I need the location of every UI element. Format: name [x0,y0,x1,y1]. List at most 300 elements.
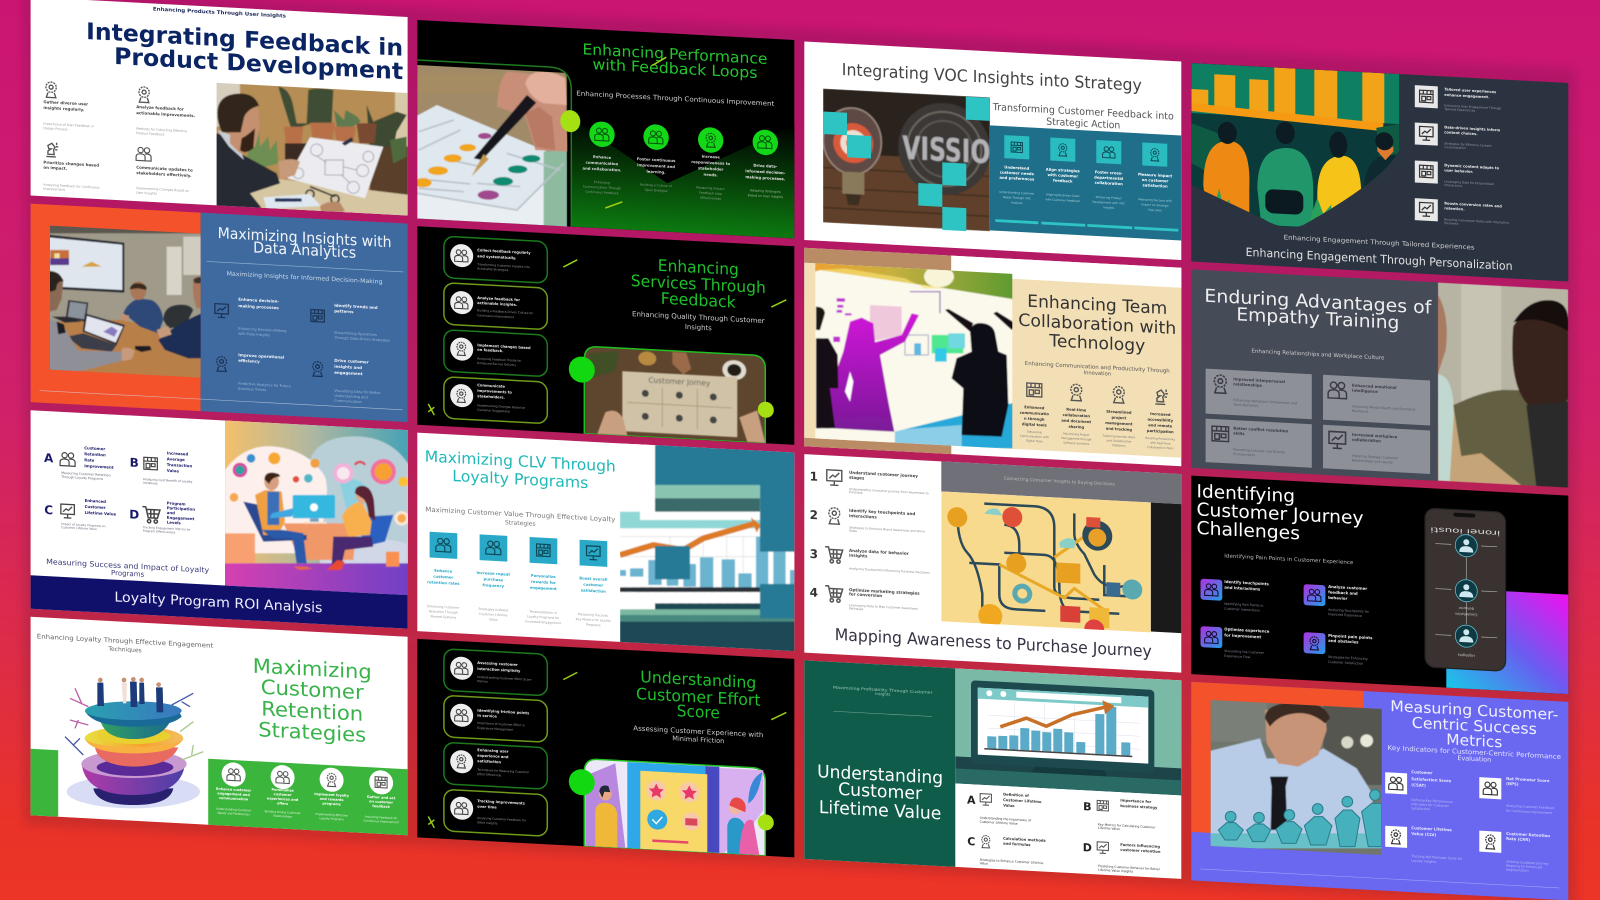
item: tailored: enhance engagement. [1444,93,1489,99]
item B: Analyzing Cost Benefit of Loyalty [143,477,193,484]
pill 3: Enhancing user [477,748,509,754]
title: Challenges [1197,518,1300,544]
title: Integrating VOC Insights into Strategy [842,60,1142,95]
item D [1083,841,1161,875]
column 4: Analyzing Feedback for [365,815,398,820]
subtitle: Innovation [1084,370,1111,378]
column 1: customer [433,574,453,580]
item A: Definition of [1003,793,1029,798]
column 1: n through [1024,417,1045,422]
pill 1: Actionable Strategies [477,266,509,272]
item A: Customer Lifetime [1003,798,1042,804]
title: Enhancing [658,256,739,279]
item 1 [1385,768,1453,812]
lime dashes [605,54,666,211]
pill 4: Analyzing Customer Feedback for [477,816,527,822]
step 3: stakeholder [698,165,724,172]
column 2 [476,534,510,623]
subtitle [425,506,615,532]
column 4: Increased [1150,412,1171,417]
column 2: Building Strong Customer [265,809,301,815]
pill 2: actionable insights. [477,301,517,307]
item: analyze: actionable improvements. [136,110,196,118]
column 1: Understanding Customer [999,190,1035,196]
pill 1: Assessing customer [477,661,518,667]
decorative lime oval [560,110,580,133]
subtitle [1388,744,1561,768]
item B: business strategy [1120,804,1158,810]
step 3: Analyzing Touchpoints Influencing Purchase Decisions [849,566,930,575]
step 3: needs. [704,172,718,177]
title: Customer [838,780,923,804]
column 3: engagement [530,585,557,591]
column 4: Measuring Success with [1138,197,1172,203]
item B: B [130,455,139,470]
item 3: Tracking Net Promoter Score for [1410,854,1463,861]
column 2: collaboration [1063,413,1090,418]
column 4: satisfaction [581,587,606,594]
column 2: offers [277,801,288,806]
step 1: Enhancing [594,180,610,185]
item: conversion: retention. [1444,206,1465,212]
card 1: Enhancing Workplace Collaboration and [1233,398,1297,405]
pill 4: Implementing Changes Based on [477,403,525,410]
subtitle: Strategies [505,519,536,528]
item D: Tracking Engagement Metrics for [142,525,191,532]
panel subtitle: Maximizing Profitability Through Customer [833,685,933,695]
column 4: on customer [1142,177,1169,183]
phone mockup: ironei iousti [1430,525,1500,537]
column 2: Customer Lifetime [479,612,508,617]
column 3: Personalize [531,573,556,579]
step 2: Sales [849,529,857,533]
column 4: and remote [1148,423,1173,429]
column 1: Understanding Customer [216,807,252,813]
item A: Improvement [84,463,114,470]
column 3: collaboration [1095,180,1123,186]
item: gather [43,82,94,133]
dark side block [1151,502,1181,633]
illustration: layered funnel with people [65,677,203,808]
slide: Enduring Advantages of Empathy Training [1191,269,1568,488]
column 3: Insights [1103,205,1115,210]
item: tailored [1415,85,1501,114]
item 2 [1304,583,1370,618]
slide: Enhancing Team Collaboration with Technology [804,244,1181,468]
title: Enhancing Team [1027,292,1167,319]
navy band with title: Loyalty Program ROI Analysis [114,589,322,616]
item 3: Customer Lifetime [1411,825,1452,832]
item D: and [167,510,175,515]
column 3: programs [322,801,341,806]
pill 3 [444,330,547,377]
item: communicate: Communicate updates to [136,165,193,173]
item: data driven: content choices. [1444,130,1478,136]
subtitle [633,724,763,747]
gray band [941,461,1181,504]
column 4: Measure impact [1138,171,1172,178]
column 2: Increase repeat [476,570,510,577]
step 4: Optimize marketing strategies [849,587,920,596]
phone mockup: Highlights [1458,653,1475,658]
pill 4: Communicate [477,383,506,389]
pill 2 [444,283,547,330]
subtitle: Enhancing Processes Through Continuous Improvement [576,89,775,108]
item B: Initiatives [143,481,158,486]
column 3: Loyalty Programs [319,816,344,821]
column 2: and document [1061,419,1091,424]
subtitle: Enhancing Quality Through Customer [632,310,765,325]
step 2: 2 [810,508,818,522]
item: communicate: User Insights [136,191,157,196]
slide: Enhancing Performance with Feedback Loops [414,20,794,253]
step 2: Building a Culture of [640,183,673,188]
pill 1 [444,649,547,696]
item C: C [967,835,975,848]
column 2: Real-time [1066,407,1087,413]
card 4 [1323,425,1430,474]
item 2: feedback and [1328,589,1358,596]
column 2 [265,764,301,819]
column 3 [525,537,562,625]
title: Metrics [1446,730,1502,751]
card 3 [1206,419,1312,468]
title [817,762,943,824]
column 2: experiences and [267,796,299,802]
item: decisions: making processes [238,303,279,310]
column 3: Fostering Remote Work [1103,434,1136,439]
subtitle: Enhancing Loyalty Through Effective Engagement [37,632,214,650]
slide: Loyalty Program ROI Analysis [31,393,420,629]
column 2: Value [489,617,498,622]
green gradient panel [571,113,794,238]
column 2: customer [274,792,292,797]
photo: blurred businessman with figures [1210,700,1382,855]
item: conversion [1415,198,1509,228]
step 4: Adapting Strategies [750,188,781,194]
item C: Customer [85,504,106,510]
card 3: Better conflict resolution [1233,426,1289,433]
item A [967,791,1042,827]
column 4: Continuous Improvement [363,818,400,824]
item: communicate: stakeholders effectively. [136,170,192,178]
column 3: and Collaborative [1107,438,1132,444]
column 3: Streamlined [1106,410,1132,415]
column 4: Impact on Strategic [1141,202,1169,208]
pill 3: Effort Effectively [477,772,502,777]
column 2: frequency [483,582,505,588]
title: Collaboration with [1018,311,1176,339]
column 1: digital tools [1022,422,1048,428]
column 2: Align strategies [1046,167,1081,173]
item C: and formulas [1003,842,1031,847]
item: decisions: Enhance decision- [238,297,279,304]
item: gather: Design Process [43,126,68,131]
column 4: with Real-Time [1150,441,1171,446]
column 2: sharing [1068,425,1084,430]
item C: Strategies to Enhance Customer Lifetime [980,858,1043,865]
item: trends: Identify trends and [334,303,378,310]
step 1: Purchase [849,490,863,495]
item: engagement: insights and [334,364,362,370]
teal panel [990,125,1181,240]
item 4: Pinpoint pain points [1328,633,1373,640]
column 1: communication [219,796,249,802]
item A: A [44,451,54,465]
item: dynamic: user behavior. [1444,168,1473,174]
item: prioritize: on impact. [43,165,68,171]
step 2: learning. [647,169,666,175]
title [1018,291,1176,358]
item: dynamic: Interactions [1444,183,1463,188]
column 4: on customer [369,799,393,805]
item: efficiency [217,351,291,393]
step 4 [745,129,786,199]
photo: customer journey board: Customer Jorney [648,376,711,388]
column 4 [1145,388,1175,450]
column 4: Boost overall [579,575,607,582]
lime decor [428,252,786,434]
item 4 [1304,632,1373,666]
step 4: making processes. [745,174,786,181]
item: conversion: Boosting Conversion Rates with Interactive [1444,217,1509,225]
pill 3: Enhanced Service Delivery [477,361,516,367]
subtitle: Enhancing Engagement Through Tailored Experiences [1284,233,1475,252]
column 2: Management through [1061,436,1092,442]
subtitle: Key Indicators for Customer-Centric Performance [1388,744,1561,761]
title: Customer Journey [1197,499,1364,529]
column 3: Implement loyalty [314,792,350,798]
item 3: Visualizing the Customer [1224,649,1265,655]
title: Enduring Advantages of [1204,286,1432,319]
item: engagement: Communication [334,399,362,404]
item: engagement: Visualizing Data for Better [334,389,381,395]
column 3: and rewards [320,797,344,802]
card 1 [1206,369,1312,419]
item 1: Identify touchpoints [1224,579,1270,586]
item: engagement: Drive customer [334,358,369,365]
column 1: customer needs [1000,169,1035,176]
item: decisions: with Data Insights [238,332,270,337]
column 3 [1103,386,1136,448]
item 1: (CSAT) [1411,782,1426,788]
slide: Enhancing Services Through Feedback [417,226,794,445]
column 1: Digital Tools [1026,439,1043,443]
step 1: Understand customer journey [849,470,918,478]
item 4: Rate (CRR) [1506,836,1530,842]
column 3: Increased Engagement [525,619,562,625]
step 4: informed decision- [745,168,786,175]
item: engagement [313,357,381,405]
item C: Calculation methods [1003,837,1046,843]
column 2 [1045,137,1081,203]
step 1: stages [849,475,865,481]
pill 4: Effort Insights [477,820,498,825]
illustration: two people at a laptop [225,420,408,596]
title: Understanding [640,667,756,692]
photo: pen on checklist [417,65,568,226]
step 4: 4 [810,585,818,600]
column 1: Communication with [1020,434,1049,439]
column 1: Reward Systems [430,614,457,620]
item: analyze: Methods for Collecting Effective [136,127,187,133]
item C: Customer Lifetime Value [61,525,97,531]
column 3: Platforms [1112,443,1126,448]
teal mosaic squares [823,89,990,232]
step 3: responsiveness to [691,159,731,166]
item: efficiency: Improve operational [238,352,285,360]
image: laptop chart with teal overlays [620,443,794,652]
item: gather: insights regularly. [43,105,85,112]
title [253,654,372,747]
step 3: Increase [702,154,720,160]
subtitle [992,102,1174,134]
item: efficiency: Predictive Analytics for Future [238,382,291,388]
column 2: Strategies to Boost [478,607,509,612]
title [1204,286,1432,336]
item 3: Value (CLV) [1411,831,1436,837]
photo: silhouettes at whiteboard [815,263,1012,449]
title: Customer [261,675,365,704]
step 2: Identify key touchpoints and [849,508,915,516]
item: data driven: Customization [1444,145,1466,150]
item: tailored: Tailored Experiences [1443,107,1476,113]
subtitle: Assessing Customer Experience with [633,724,763,739]
column 4: feedback [372,804,391,809]
step 2 [810,506,925,537]
column 1: retention rates [427,579,460,586]
pill 2 [444,695,547,742]
title: Lifetime Value [819,798,941,824]
item 3: Loyalty Insights [1411,859,1437,864]
title: Loyalty Programs [452,467,588,492]
subtitle: Strategic Action [1046,117,1120,132]
column 3: Implementing Effective [315,812,348,818]
item: communicate [136,147,193,198]
card 3: Environments [1233,452,1256,457]
lime and green dots [569,769,774,831]
photo: customer journey board [584,346,766,444]
title [1196,481,1364,548]
subtitle: Minimal Friction [672,734,724,745]
step 3: Analyze data for behavior [849,548,909,556]
title: Mapping Awareness to Purchase Journey [835,625,1152,661]
item: dynamic [1415,160,1500,190]
pill 2: Continuous Improvement [477,313,515,319]
item D: Predicting Customer Behavior for Better [1098,864,1161,871]
subtitle [632,310,765,335]
step 2: Open Dialogue [645,188,668,193]
step 3 [691,126,731,201]
card 3: Promoting Inclusive and Diverse [1233,448,1285,454]
item 4: Customer Satisfaction [1328,660,1363,666]
pill 4: Customer Suggestions [477,408,510,414]
item 1: Defining Key Performance [1411,798,1453,804]
title [218,224,392,264]
dark green panel [804,660,955,867]
pill 1: interaction simplicity [477,667,521,673]
pill 1: Collect feedback regularly [477,248,531,255]
title: Data Analytics [253,238,356,262]
column 1 [216,762,252,817]
item: conversion: Elements [1444,221,1459,226]
step 1: Communication Through [583,184,621,191]
item 3 [1200,625,1270,660]
pill 4 [444,789,547,836]
item B: Lifetime Value [1098,826,1120,831]
column 4: Gather and act [367,795,396,800]
pill 2: Experience Management [477,726,514,732]
item: engagement: engagement [334,370,363,376]
column 3: Foster cross- [1095,169,1123,176]
subtitle: Measuring Success and Impact of Loyalty [46,557,210,575]
item: prioritize [43,142,100,194]
item: prioritize: Improvement [43,187,66,192]
item 3 [1385,824,1463,865]
pill 4: Tracking improvements [477,799,525,806]
item D: Factors influencing [1120,843,1160,849]
beige and brown blocks [804,248,1181,466]
illustration: rating on a phone [584,758,766,856]
item D: Levels [167,520,181,525]
column 3: and tracking [1106,427,1132,432]
item D [129,498,195,536]
column 2: Software Solutions [1063,441,1090,446]
item: engagement: Understanding and [334,394,368,399]
item C [967,835,1046,869]
item B: Importance for [1120,798,1151,804]
column 2: Relationships [273,814,292,819]
pill 1: Metrics [477,679,488,684]
item D: D [1083,841,1092,855]
subtitle: Identifying Pain Points in Customer Experience [1224,553,1353,566]
step 1: Understanding Consumer Journey from Awareness to [849,487,929,495]
step 3: Effectiveness [700,196,721,201]
step 4: Drive data- [753,163,778,169]
green panel [208,759,408,835]
title: Enhancing Performance [582,40,768,68]
item: communicate: Implementing Changes Based on [136,186,189,193]
pill 1: Transforming Customer Insights into [476,262,530,269]
pill 2: Analyze feedback for [477,296,520,302]
step 2 [637,123,676,193]
column 3: management [1105,421,1133,426]
item: gather: Importance of User Feedback in [43,122,94,128]
title: Technology [1048,331,1145,356]
step 3 [810,546,930,575]
slide: Maximizing Customer Retention Strategies [31,617,408,835]
pill 4: over time [477,805,497,810]
step 1 [810,468,929,498]
subtitle: Evaluation [1457,754,1491,764]
card 1: relationships [1233,381,1263,388]
step 2: improvement and [637,162,675,169]
column 2 [1061,384,1092,446]
item 1: Satisfaction Score [1411,776,1452,783]
step 3: Feedback Loop [699,191,722,196]
slide: Understanding Customer Lifetime Value [804,660,1181,879]
item: prioritize: Analyzing Feedback for Continuous [43,183,100,190]
subtitle [46,557,210,582]
item: efficiency: efficiency [238,358,260,364]
rounded green outline [417,60,571,227]
title [1390,697,1558,754]
item 4: Segmentation [1506,868,1529,873]
item 1: and interactions [1224,585,1261,592]
item B: Transaction [167,462,192,468]
item 2: Analyzing Touchpoints for [1328,608,1370,614]
column 1: engagement and [217,791,250,797]
